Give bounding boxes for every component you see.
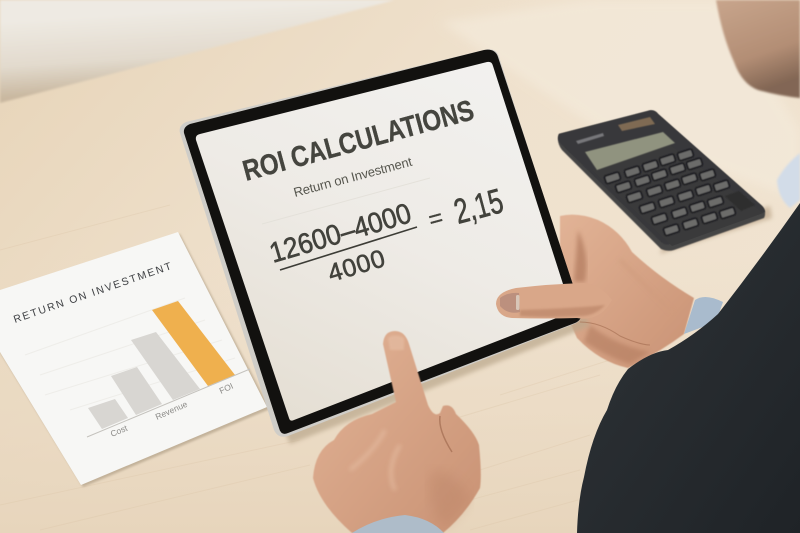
right shirt cuff bbox=[684, 297, 723, 334]
bar labels: Revenue bbox=[154, 399, 189, 422]
brand mark bbox=[576, 133, 604, 144]
jacket sleeve bbox=[577, 203, 800, 533]
paper heading: RETURN ON INVESTMENT bbox=[12, 260, 173, 326]
paper: return on investment chart bbox=[0, 232, 270, 487]
solar strip bbox=[618, 117, 655, 131]
tablet screen bbox=[196, 62, 572, 421]
face bbox=[716, 0, 800, 98]
bar labels: Cost bbox=[109, 423, 129, 439]
formula denominator: 4000 bbox=[325, 244, 388, 288]
tablet bbox=[180, 49, 590, 444]
formula equals sign: = bbox=[426, 204, 446, 234]
keys bbox=[604, 149, 755, 236]
right thumb bbox=[496, 283, 650, 345]
formula result: 2,15 bbox=[450, 181, 507, 232]
left hand pointing bbox=[313, 331, 481, 533]
bar chart bbox=[87, 301, 250, 437]
wall bbox=[0, 0, 395, 103]
shirt collar bbox=[777, 153, 800, 208]
left shirt cuff bbox=[352, 515, 444, 533]
screen heading: ROI CALCULATIONS bbox=[239, 94, 478, 188]
right hand behind tablet bbox=[560, 215, 694, 368]
screen subheading: Return on Investment bbox=[292, 154, 414, 200]
calculator bbox=[558, 110, 772, 254]
formula fraction line bbox=[280, 227, 417, 270]
formula numerator: 12600–4000 bbox=[266, 198, 415, 270]
bar labels: FOI bbox=[218, 381, 235, 396]
display bbox=[585, 132, 675, 170]
bar labels bbox=[109, 381, 235, 439]
